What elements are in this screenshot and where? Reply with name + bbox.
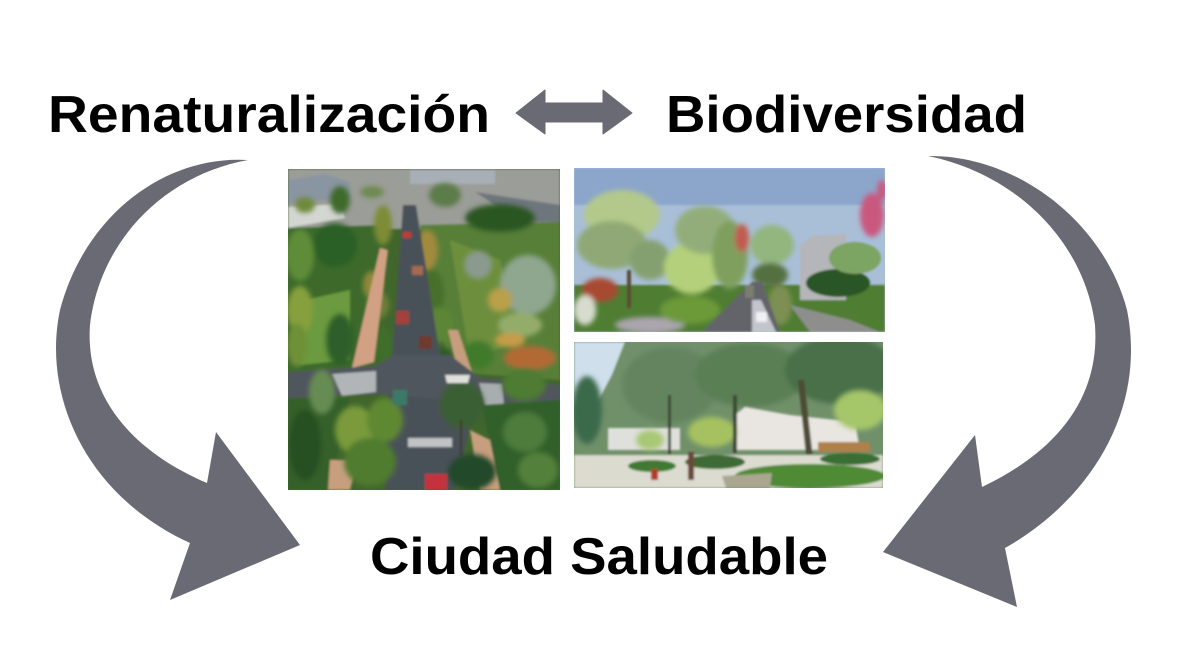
image: tree-lined boulevard with road (574, 168, 887, 333)
arrow: curved left arrow to Ciudad Saludable (56, 160, 300, 600)
heading: Renaturalización: Renaturalización (48, 86, 490, 144)
image: aerial view of renaturalised avenue (286, 169, 560, 490)
arrow: two-way between Renaturalización and Biodiversidad (516, 90, 632, 134)
heading: Ciudad Saludable: Ciudad Saludable (370, 528, 828, 586)
image: urban park with trees and buildings (572, 336, 895, 488)
arrow: curved right arrow to Ciudad Saludable (883, 156, 1131, 607)
heading: Biodiversidad: Biodiversidad (666, 86, 1027, 144)
